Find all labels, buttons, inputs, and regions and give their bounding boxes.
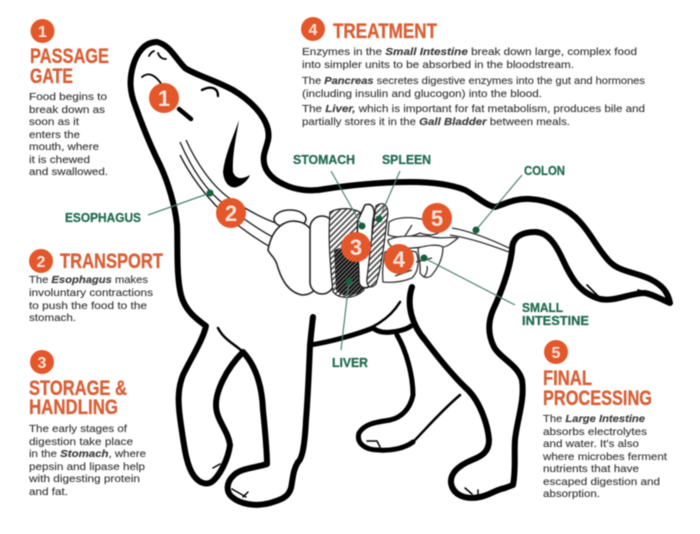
- digestive organs: [180, 140, 509, 297]
- step badge 4: [301, 17, 325, 41]
- stomach: [357, 204, 374, 288]
- text: final processing description: [542, 413, 667, 500]
- lung top lobe: [274, 210, 306, 228]
- text: final processing description: and water. It's also: [543, 438, 639, 450]
- step badge 1: [30, 19, 54, 43]
- marker 3 on stomach: 3: [350, 235, 362, 260]
- step badge 4: 4: [309, 22, 318, 39]
- text: passage gate description: Food begins to: [29, 91, 107, 103]
- heading: treatment: TREATMENT: [333, 20, 437, 43]
- text: final processing description: nutrients that have: [543, 463, 639, 475]
- heading: transport: TRANSPORT: [60, 250, 163, 273]
- text: storage description: in the Stomach , where: [29, 448, 146, 460]
- heading: storage and handling: HANDLING: [29, 396, 118, 419]
- dog illustration: [131, 42, 670, 505]
- text: passage gate description: break down as: [29, 104, 105, 116]
- heading: final processing: [543, 367, 652, 410]
- text: passage gate description: soon as it: [29, 116, 79, 128]
- text: final processing description: where microbes ferment: [542, 451, 667, 463]
- leader lines: [148, 171, 522, 350]
- text: transport description: to push the food to the: [29, 300, 147, 312]
- text: final processing description: The Large Intestine: [543, 413, 645, 425]
- heading: storage and handling: STORAGE &: [29, 377, 127, 400]
- dog eye: [202, 88, 218, 96]
- text: treatment description: into simpler units to be absorbed in the bloodstream.: [302, 59, 574, 71]
- panel: transport: [29, 249, 163, 324]
- text: treatment description: The Liver, which is important for fat metabolism, produces bile and: [302, 103, 645, 115]
- marker 5 on colon: 5: [431, 206, 443, 231]
- heading: final processing: FINAL: [543, 367, 592, 390]
- label: small intestine: [522, 300, 589, 328]
- text: transport description: involuntary contractions: [29, 287, 153, 299]
- step badge 2: 2: [37, 254, 46, 271]
- dog ear: [223, 120, 250, 187]
- text: transport description: The Esophagus makes: [29, 274, 148, 286]
- text: treatment description: (including insulin and glucogon) into the blood.: [302, 88, 542, 100]
- text: storage description: The early stages of: [29, 423, 127, 435]
- text: passage gate description: and swallowed.: [29, 166, 108, 178]
- dark oesophagus section: [272, 233, 285, 258]
- marker 4 on small intestine: [384, 244, 414, 274]
- label: liver: LIVER: [332, 355, 369, 370]
- text: passage gate description: mouth, where: [29, 141, 99, 153]
- step badge 1: 1: [38, 24, 47, 41]
- dog belly line: [310, 326, 411, 345]
- text: final processing description: absorbs electrolytes: [543, 426, 647, 438]
- text: storage description: digestion take place: [29, 436, 133, 448]
- panel: storage and handling: [28, 350, 146, 498]
- step badge 5: 5: [552, 345, 561, 362]
- step badge 3: [30, 350, 54, 374]
- text: storage description: and fat.: [29, 486, 68, 498]
- text: transport description: stomach.: [29, 312, 76, 324]
- paw details: [213, 441, 478, 497]
- step badge 3: 3: [38, 355, 47, 372]
- second lobe: [310, 216, 334, 294]
- text: transport description: [29, 274, 153, 324]
- esophagus tube: [180, 140, 283, 248]
- heading: storage and handling: [29, 377, 127, 419]
- text: passage gate description: [29, 91, 108, 178]
- label: spleen: SPLEEN: [382, 152, 431, 167]
- text: treatment description: partially stores it in the Gall Bladder between meals.: [302, 116, 570, 128]
- text: final processing description: absorption.: [543, 488, 600, 500]
- panel: final processing: [542, 340, 667, 500]
- marker 3 on stomach: [341, 232, 371, 262]
- tail fur: [587, 285, 650, 298]
- small and large intestine: [383, 218, 509, 282]
- spleen, hatched: [367, 204, 388, 287]
- dog nose: [149, 51, 166, 59]
- heading: passage gate: [30, 45, 109, 88]
- heading: passage gate: PASSAGE: [30, 45, 109, 68]
- text: final processing description: escaped digestion and: [543, 476, 660, 488]
- marker 1 on mouth: 1: [158, 86, 170, 111]
- label: small intestine: SMALL: [522, 300, 563, 315]
- text: treatment description: [302, 46, 645, 128]
- step badge 5: [544, 340, 568, 364]
- marker 2 on esophagus: 2: [225, 201, 237, 226]
- dog far hind leg: [358, 335, 413, 450]
- label: esophagus: ESOPHAGUS: [65, 210, 141, 225]
- label: small intestine: INTESTINE: [522, 313, 589, 328]
- text: passage gate description: enters the: [29, 129, 80, 141]
- marker 1 on mouth: [149, 83, 179, 113]
- panel: treatment: [301, 17, 645, 128]
- heading: passage gate: GATE: [30, 65, 73, 88]
- dog hind leg, tail and back: [157, 42, 670, 498]
- label: colon: COLON: [524, 163, 565, 178]
- left digestive lobe: [268, 221, 321, 295]
- text: storage description: [28, 423, 146, 498]
- marker 5 on colon: [422, 203, 452, 233]
- dog mouth: [142, 74, 162, 85]
- text: treatment description: The Pancreas secretes digestive enzymes into the gut and hormones: [302, 75, 645, 87]
- leader dots: [206, 190, 480, 284]
- panel: passage gate: [29, 19, 109, 178]
- text: treatment description: Enzymes in the Small Intestine break down large, complex food: [302, 46, 637, 58]
- marker 4 on small intestine: 4: [393, 247, 406, 272]
- liver, dark hatched: [329, 209, 364, 297]
- label: stomach: STOMACH: [293, 152, 355, 167]
- text: storage description: pepsin and lipase help: [29, 461, 145, 473]
- heading: final processing: PROCESSING: [543, 387, 652, 410]
- text: passage gate description: it is chewed: [29, 154, 90, 166]
- text: storage description: with digesting protein: [28, 473, 140, 485]
- marker 2 on esophagus: [216, 198, 246, 228]
- dog body outline: head, back and tail: [131, 42, 313, 505]
